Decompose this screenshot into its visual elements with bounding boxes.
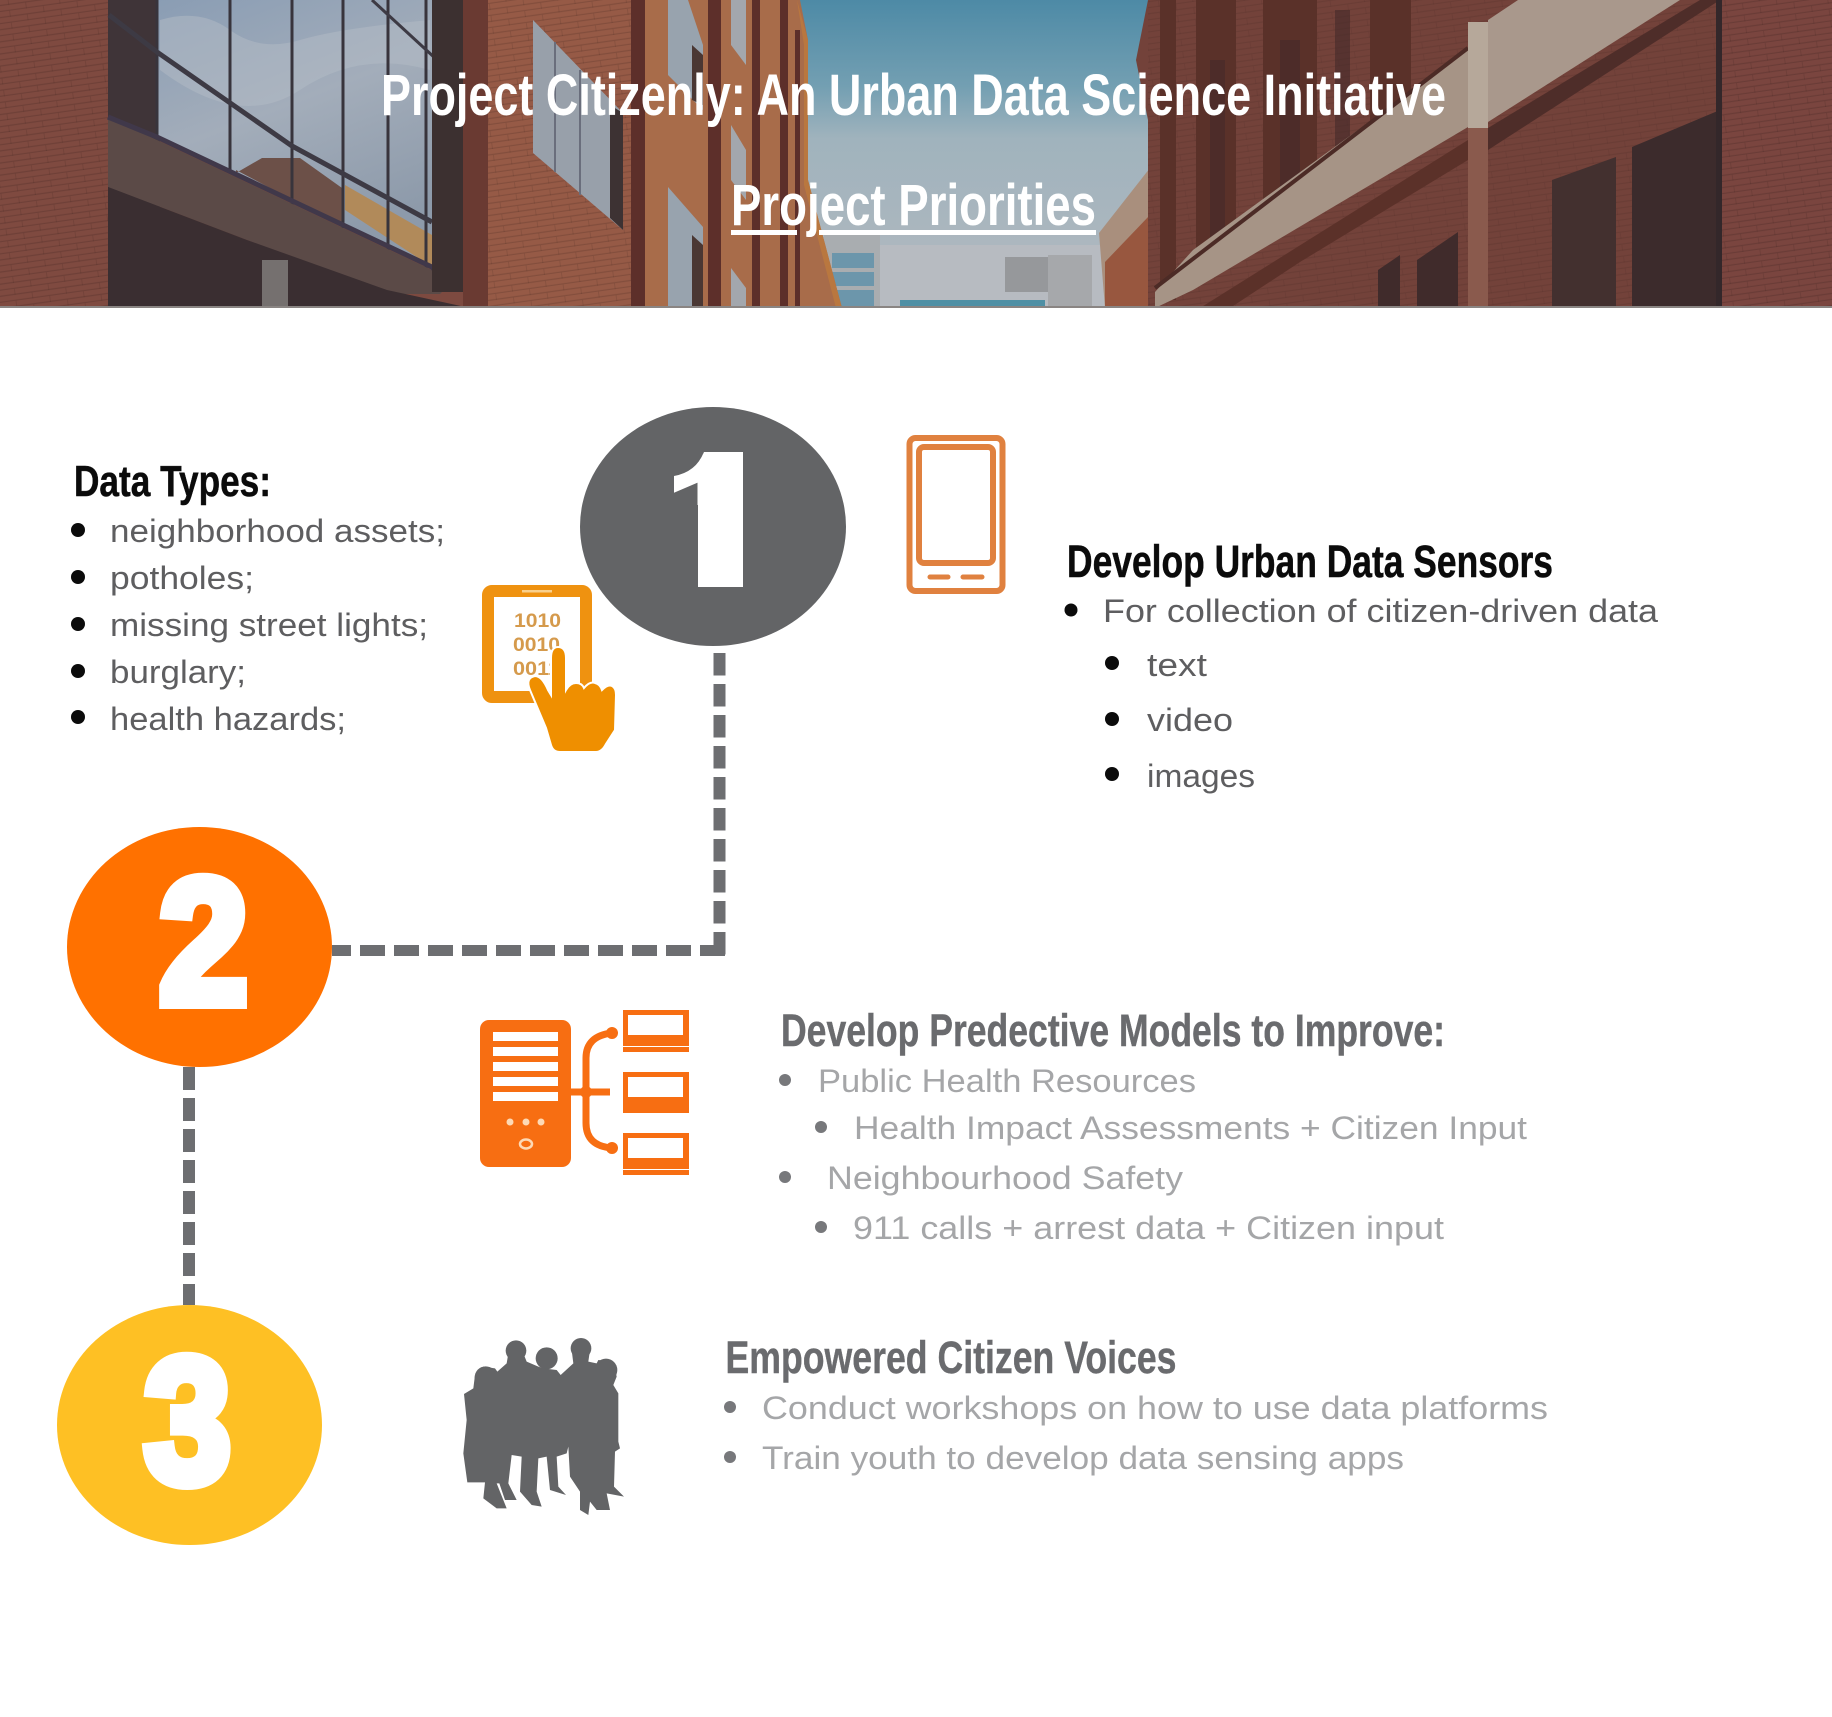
list: data types: neighborhood assets;	[110, 513, 445, 549]
list: data types: health hazards;	[110, 701, 346, 737]
step 2 badge: 2	[159, 842, 248, 1041]
list: citizen voices	[724, 1390, 1548, 1476]
list: data types: missing street lights;	[110, 607, 428, 643]
list: predictive models: Public Health Resources	[818, 1063, 1196, 1099]
panel: urban data sensors	[1064, 536, 1658, 794]
step 1 badge	[580, 407, 846, 646]
list: predictive models	[779, 1063, 1527, 1246]
list: citizen voices: Conduct workshops on how to use data platforms	[762, 1390, 1548, 1426]
icon: server network	[480, 1010, 689, 1175]
heading: data types: Data Types:	[74, 457, 271, 506]
dashed connector 1 to 2	[332, 653, 725, 956]
heading: urban data sensors: Develop Urban Data Sensors	[1067, 536, 1553, 587]
step 3 badge: 3	[144, 1321, 231, 1520]
panel: empowered citizen voices	[724, 1332, 1548, 1476]
list: sensors: For collection of citizen-driven data	[1103, 593, 1658, 629]
step 2 badge	[67, 827, 332, 1067]
list: predictive models: 911 calls + arrest data + Citizen input	[853, 1210, 1444, 1246]
title: Project Citizenly: An Urban Data Science Initiative	[381, 63, 1446, 128]
icon: tablet with hand	[488, 590, 616, 752]
icon: group of people	[463, 1338, 624, 1515]
icon: tablet with hand: 0010	[513, 635, 560, 656]
subtitle with underline: Project Priorities	[731, 173, 1096, 238]
icon: smartphone	[910, 438, 1002, 591]
list: sensors: images	[1147, 758, 1255, 794]
icon: tablet with hand: 0011	[513, 659, 560, 680]
header banner with street photo	[0, 0, 1832, 308]
step 3 badge	[57, 1305, 322, 1545]
heading: predictive models: Develop Predective Models to Improve:	[781, 1005, 1445, 1056]
list: predictive models: Neighbourhood Safety	[827, 1160, 1183, 1196]
step 1 badge: 1	[639, 413, 792, 625]
list: predictive models: Health Impact Assessments + Citizen Input	[854, 1110, 1527, 1146]
list: data types: potholes;	[110, 560, 254, 596]
list: sensors: video	[1147, 702, 1233, 738]
list: data types	[71, 513, 445, 737]
panel: data types	[71, 457, 445, 737]
heading: citizen voices: Empowered Citizen Voices	[726, 1332, 1176, 1383]
list: data types: burglary;	[110, 654, 246, 690]
panel: predictive models	[779, 1005, 1527, 1246]
list: citizen voices: Train youth to develop data sensing apps	[762, 1440, 1404, 1476]
icon: tablet with hand: 1010	[514, 611, 561, 632]
dashed connector 2 to 3	[183, 1067, 195, 1305]
list: sensors	[1064, 593, 1658, 794]
list: sensors: text	[1147, 647, 1207, 683]
